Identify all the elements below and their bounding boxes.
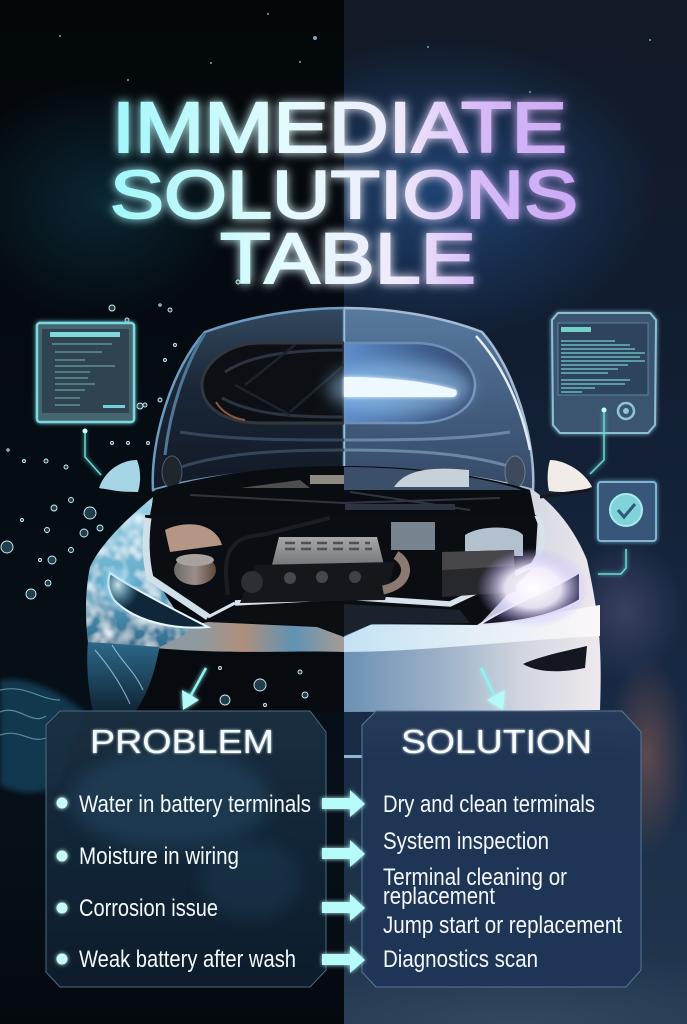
left reservoirs (165, 524, 222, 552)
car: hood (153, 308, 533, 490)
frame struts (146, 518, 208, 617)
star specks (59, 13, 651, 93)
water droplets (1, 280, 308, 706)
panel: problem (46, 711, 326, 987)
arrow: down to solution (481, 668, 505, 710)
title: IMMEDIATE (112, 89, 567, 168)
list: problems: Corrosion issue (79, 895, 218, 922)
list: solutions: Dry and clean terminals (383, 791, 595, 818)
panel: right HUD document with connector (552, 313, 656, 474)
car: windshield and cowl (150, 466, 535, 515)
car: engine bay (145, 515, 543, 636)
car: left body with water (86, 495, 344, 712)
title: TABLE (220, 220, 476, 299)
heading: solution: SOLUTION (401, 723, 592, 760)
list: solutions (383, 791, 622, 973)
list: problems: Water in battery terminals (79, 791, 311, 818)
panel: solution (362, 711, 641, 987)
list: solutions: Diagnostics scan (383, 946, 538, 973)
list: solutions: Terminal cleaning or (383, 864, 567, 891)
panel: check mark badge with connector (598, 482, 656, 574)
list: solutions: replacement (383, 883, 495, 910)
list: solutions: System inspection (383, 828, 549, 855)
list: solutions: Jump start or replacement (383, 912, 622, 939)
left headlight (96, 559, 208, 628)
arrow: down to problem (182, 668, 206, 710)
list: problems: Weak battery after wash (79, 946, 296, 973)
car: mirrors (99, 460, 592, 498)
title: SOLUTIONS (110, 157, 578, 233)
engine cover (272, 537, 384, 565)
gap highlight (344, 755, 364, 758)
arrows: problem to solution (322, 790, 365, 973)
list: problems: Moisture in wiring (79, 843, 239, 870)
panel: left HUD document with connector (37, 323, 134, 574)
bullets (56, 798, 68, 964)
title (110, 89, 578, 299)
car: right body (344, 490, 601, 712)
heading: problem: PROBLEM (90, 723, 274, 760)
right components (391, 522, 435, 550)
right headlight (477, 548, 589, 628)
list: problems (79, 791, 311, 973)
